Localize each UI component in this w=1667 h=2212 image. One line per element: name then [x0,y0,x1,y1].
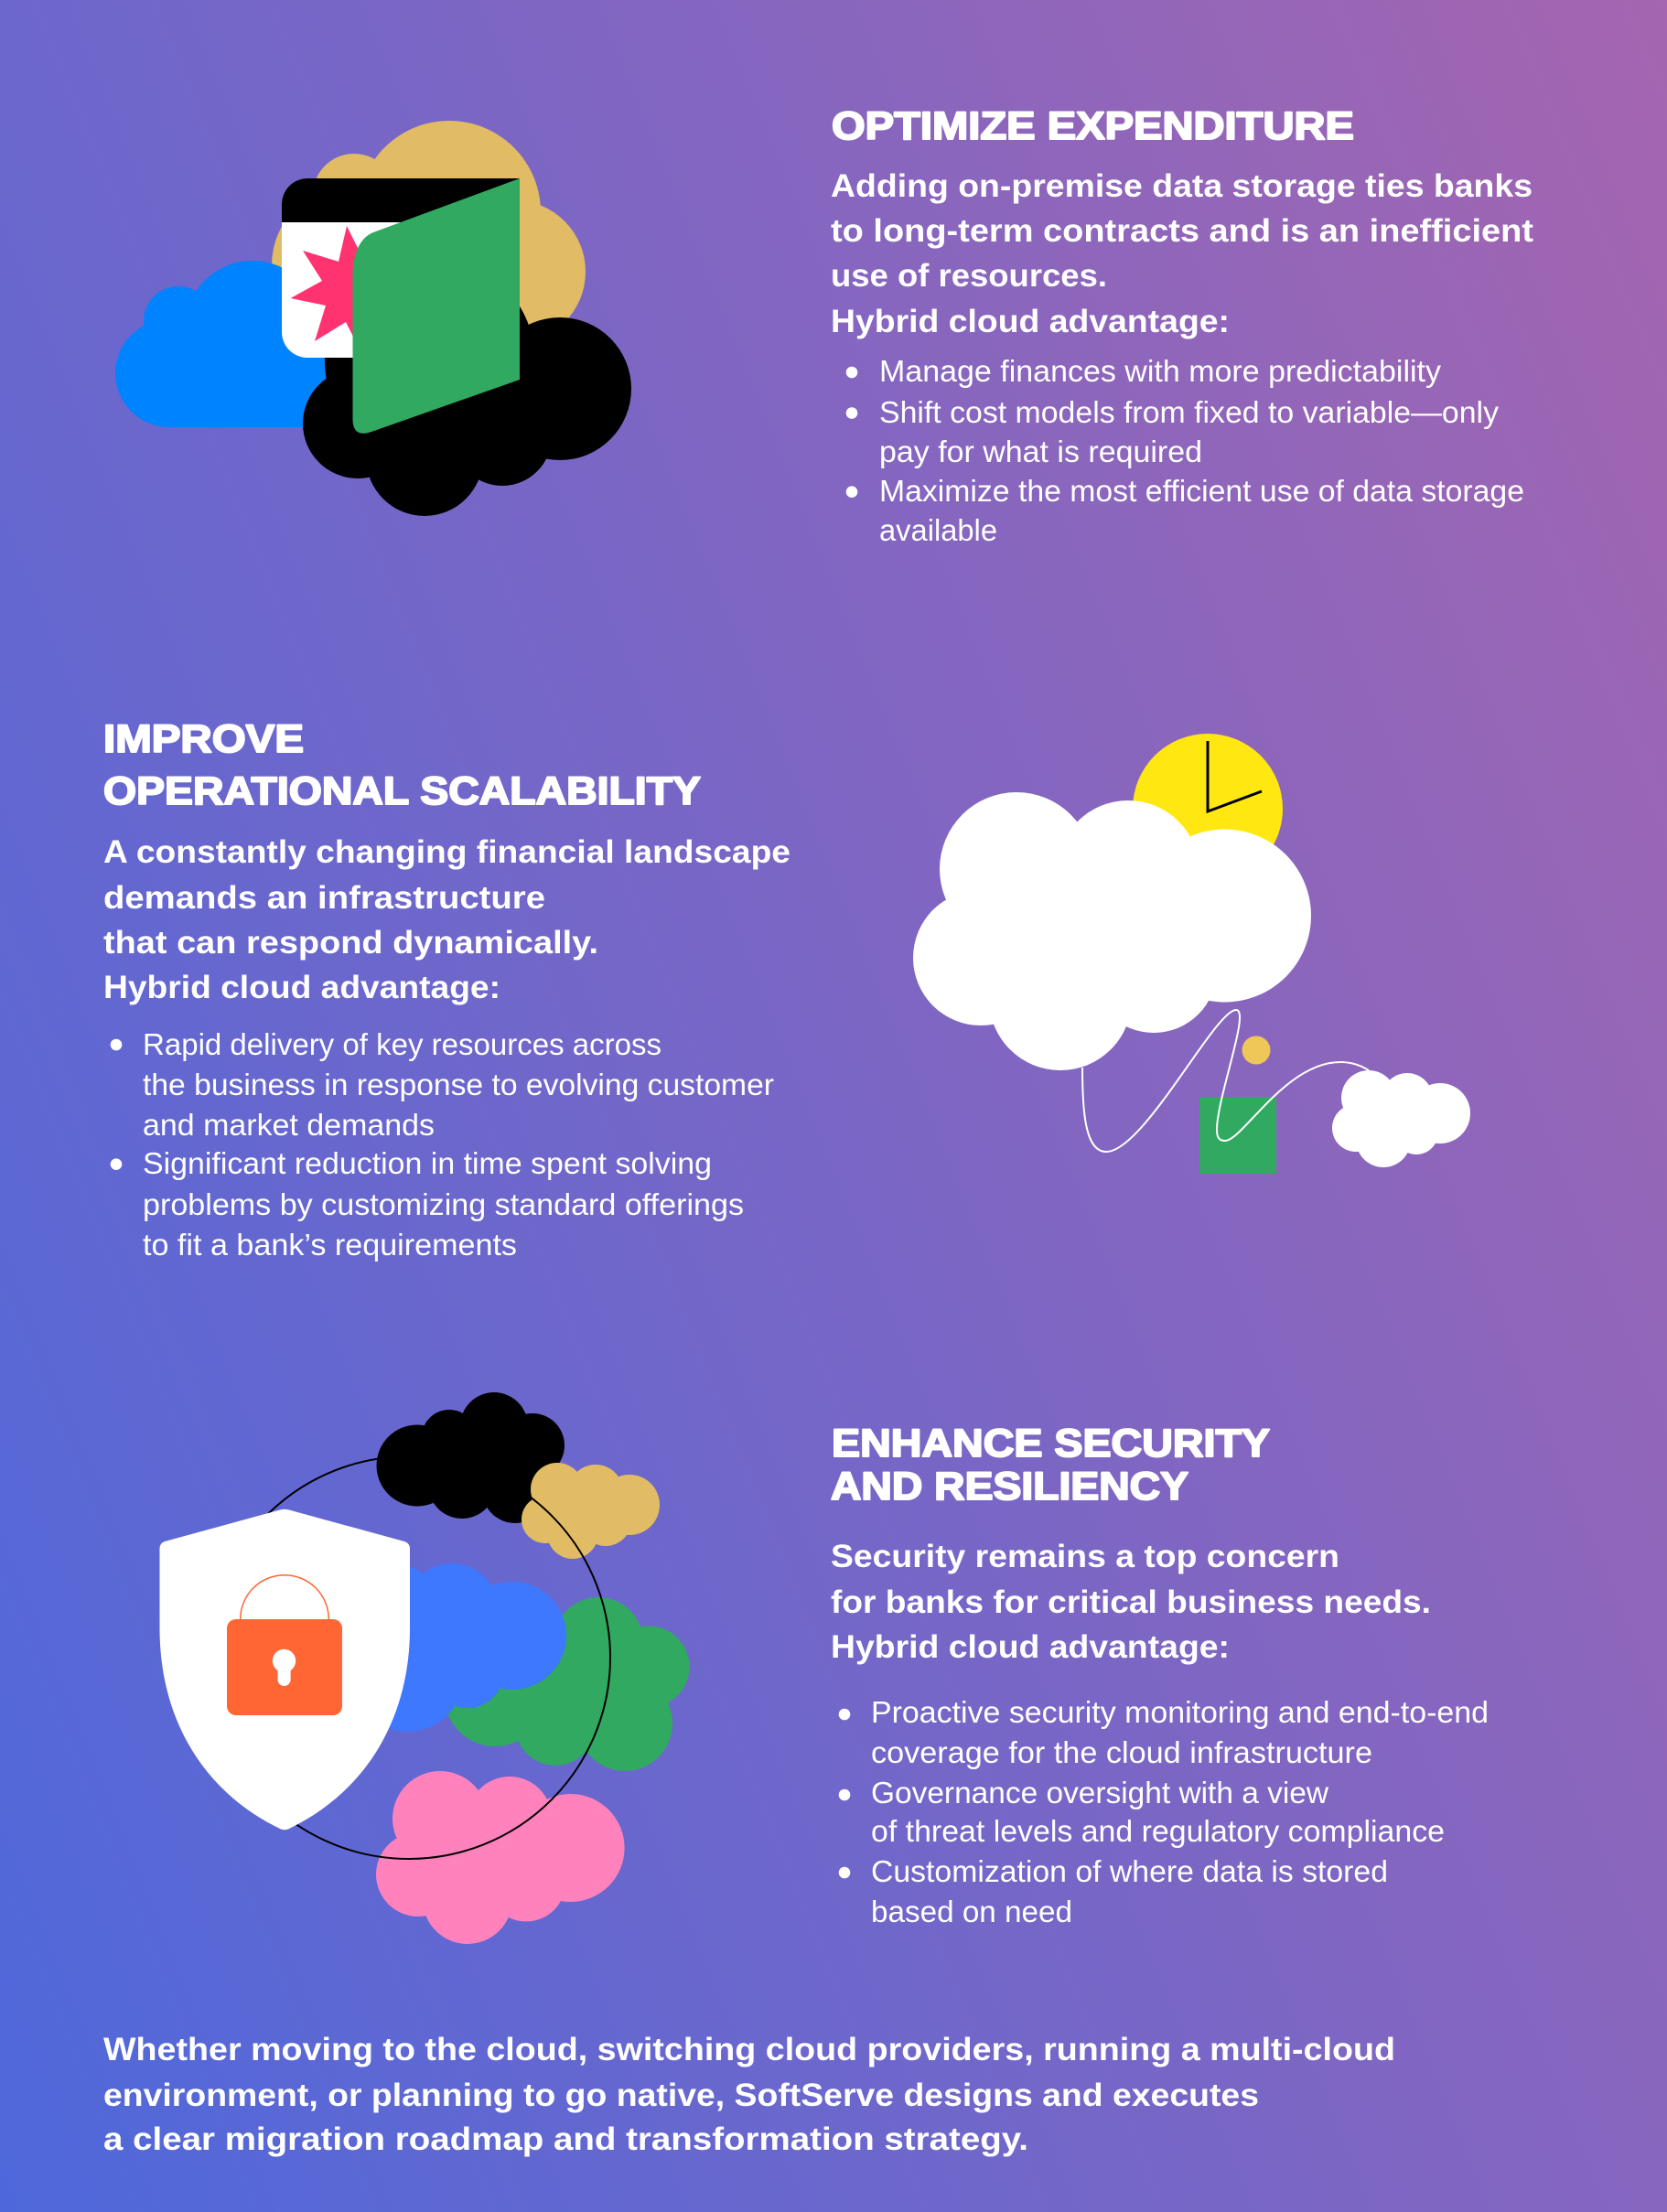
intro text: Hybrid cloud advantage: [831,1628,1230,1665]
bullet list: Significant reduction in time spent solving [143,1146,712,1180]
bullet list: Shift cost models from fixed to variable—only [879,395,1500,429]
illustration: security shield and clouds [159,1392,690,1944]
icon: padlock [227,1575,342,1715]
intro text: Security remains a top concern [831,1538,1339,1574]
intro text: to long-term contracts and is an inefficient [831,212,1533,249]
icon: pink starburst [291,226,384,341]
pink cloud [376,1771,625,1944]
panel: improve operational scalability [103,717,790,1262]
green wallet flap [353,178,520,434]
bullet list [846,354,1524,547]
heading: ENHANCE SECURITY [832,1422,1270,1466]
black cloud [377,1392,565,1523]
blue cloud [339,1563,566,1732]
intro text: A constantly changing financial landscape [103,833,790,870]
heading: AND RESILIENCY [831,1465,1188,1509]
closing statement: environment, or planning to go native, SoftServe designs and executes [103,2077,1259,2113]
bullet list: Maximize the most efficient use of data storage [879,474,1524,508]
bullet list: based on need [871,1895,1072,1928]
gold cloud [522,1463,660,1559]
bullet list: problems by customizing standard offerings [143,1187,744,1221]
intro text: for banks for critical business needs. [831,1584,1431,1620]
bullet list [111,1027,774,1262]
closing statement [103,2031,1395,2157]
heading [831,1422,1270,1509]
heading: OPERATIONAL SCALABILITY [103,769,701,813]
illustration: scalability clouds and clock [913,734,1470,1174]
bullet list: to fit a bank’s requirements [143,1228,517,1262]
browser card [282,178,520,358]
icon: yellow clock [1133,734,1283,884]
green square [1199,1097,1276,1174]
intro text [831,1538,1431,1665]
small white cloud [1332,1070,1470,1167]
bullet list: available [879,513,997,547]
blue cloud [115,261,361,427]
bullet list: Governance oversight with a view [871,1776,1328,1809]
gold cloud [272,121,586,366]
black cloud [303,256,631,516]
bullet list: Customization of where data is stored [871,1854,1388,1888]
intro text: use of resources. [831,257,1107,294]
panel: optimize expenditure [831,104,1533,547]
large white cloud [913,792,1311,1070]
intro text: demands an infrastructure [103,879,545,916]
connector line [1082,1010,1369,1152]
heading [103,717,701,813]
gold dot [1242,1036,1270,1065]
intro text: that can respond dynamically. [103,924,598,961]
closing statement: a clear migration roadmap and transformation strategy. [103,2121,1028,2157]
bullet list: Proactive security monitoring and end-to-end [871,1695,1489,1729]
bullet list: of threat levels and regulatory compliance [871,1814,1445,1848]
intro text: Adding on-premise data storage ties banks [831,167,1533,204]
icon: shield [159,1509,410,1830]
bullet list: pay for what is required [879,435,1202,468]
illustration: expenditure clouds and wallet [115,121,631,516]
intro text [103,833,790,1005]
intro text: Hybrid cloud advantage: [103,969,500,1005]
green cloud [445,1597,690,1771]
intro text [831,167,1533,339]
orbit ring [208,1456,610,1859]
bullet list [839,1695,1489,1928]
panel: enhance security and resiliency [831,1422,1489,1928]
bullet list: and market demands [143,1108,435,1142]
heading: OPTIMIZE EXPENDITURE [832,104,1354,148]
bullet list: Rapid delivery of key resources across [143,1027,661,1061]
bullet list: coverage for the cloud infrastructure [871,1735,1372,1769]
bullet list: the business in response to evolving customer [143,1068,774,1101]
heading: IMPROVE [103,717,304,761]
intro text: Hybrid cloud advantage: [831,303,1230,339]
closing statement: Whether moving to the cloud, switching cloud providers, running a multi-cloud [103,2031,1395,2067]
bullet list: Manage finances with more predictability [879,354,1442,388]
